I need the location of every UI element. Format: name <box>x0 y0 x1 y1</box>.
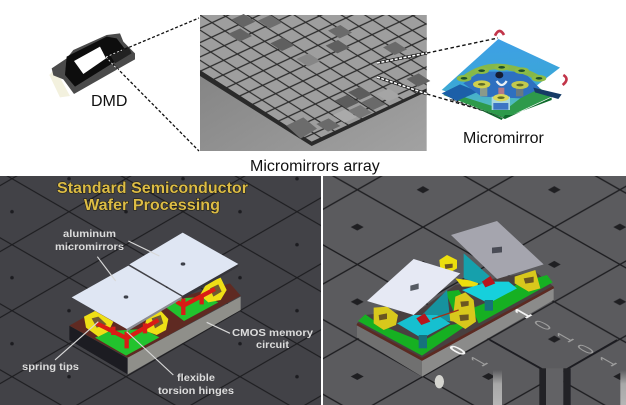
leader lines: chip to array <box>106 18 199 151</box>
yellow spring tips <box>84 278 227 337</box>
brown spring centres <box>92 284 222 328</box>
callout labels: flexible <box>177 373 215 384</box>
background tile grid <box>0 176 321 405</box>
spring ring <box>457 64 546 82</box>
background tile grid <box>323 176 626 405</box>
yellow spring tips <box>374 255 540 330</box>
micromirror pair on CMOS base <box>55 233 241 375</box>
leader lines <box>55 241 230 375</box>
floor details: raised tile and smears <box>435 340 626 405</box>
mirror plate <box>442 39 560 110</box>
callout labels: CMOS memory <box>232 328 313 339</box>
red hinges <box>416 276 495 325</box>
cyan yoke wedges <box>397 253 517 348</box>
binary digits on the floor: 0 <box>528 317 557 333</box>
red torsion hinges <box>97 289 215 348</box>
label: DMD: DMD <box>91 93 127 110</box>
photo: micromirror array <box>200 14 430 151</box>
base plate <box>443 88 552 118</box>
binary digits on the floor: 1 <box>464 353 493 369</box>
callout labels <box>22 229 313 397</box>
callout labels: spring tips <box>22 362 79 373</box>
brown spring centres <box>379 264 534 321</box>
mirror: on state <box>451 221 544 279</box>
binary digits on the floor: 1 <box>508 305 537 321</box>
rotation arrows <box>495 31 567 85</box>
icon: DMD chip package <box>49 33 135 97</box>
leader lines: array to micromirror <box>377 38 505 117</box>
heading: Wafer Processing <box>84 197 220 214</box>
panel: DMD chip and micromirror overview <box>49 14 567 175</box>
callout labels: torsion hinges <box>158 386 234 397</box>
green electrodes <box>95 297 218 356</box>
base <box>357 272 554 377</box>
binary digits on the floor: 0 <box>443 342 472 358</box>
green electrodes <box>358 275 553 356</box>
binary digits on the floor <box>443 305 622 369</box>
binary digits on the floor: 0 <box>571 341 600 357</box>
binary digits on the floor: 1 <box>593 353 622 369</box>
label: Micromirror: Micromirror <box>463 130 545 147</box>
panel: standard semiconductor wafer processing <box>0 176 321 405</box>
CMOS substrate <box>69 283 241 374</box>
heading <box>57 180 248 214</box>
callout labels: aluminum <box>63 229 116 240</box>
tilted mirror pair on base <box>357 221 626 405</box>
panel: tilted micromirrors with binary states <box>323 176 626 405</box>
label: Micromirrors array: Micromirrors array <box>250 158 380 175</box>
icon: single micromirror cell <box>442 31 567 120</box>
yoke arms <box>442 72 562 101</box>
aluminum mirror plates <box>72 233 238 332</box>
heading: Standard Semiconductor <box>57 180 248 197</box>
callout labels: micromirrors <box>55 242 124 253</box>
binary digits on the floor: 1 <box>550 329 579 345</box>
mirror: off state <box>367 259 460 315</box>
central post and hinges <box>473 72 529 110</box>
callout labels: circuit <box>256 340 290 351</box>
